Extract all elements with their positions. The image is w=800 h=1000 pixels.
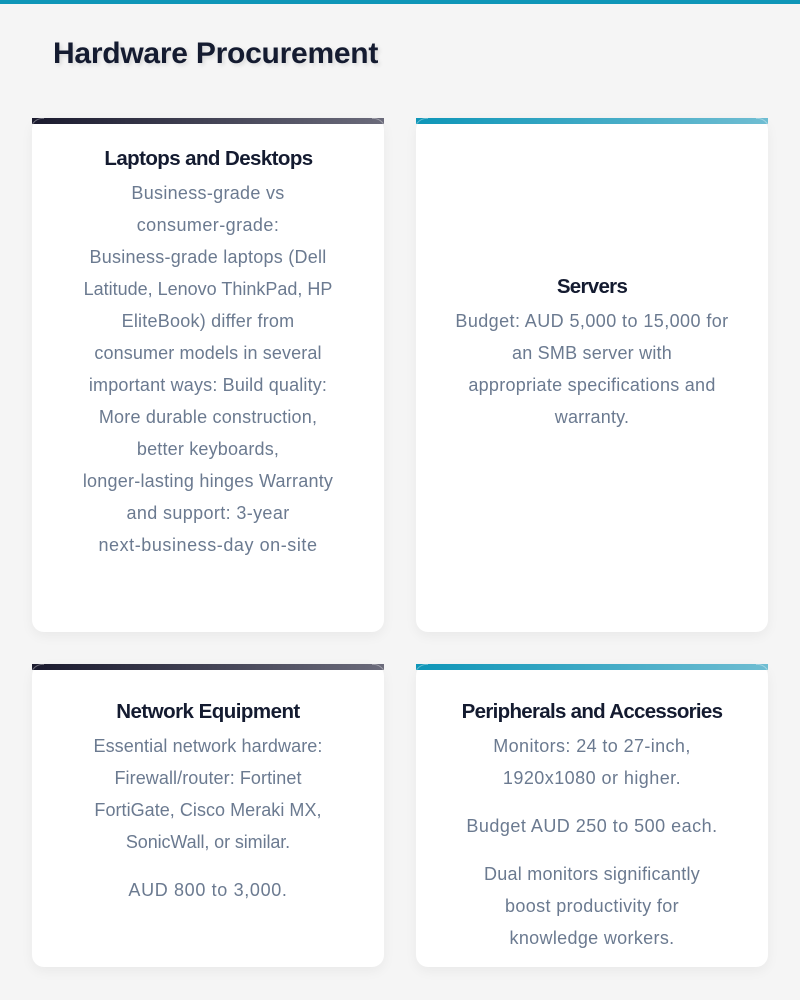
heading: Laptops and Desktops <box>104 147 313 170</box>
body text: Budget AUD 250 to 500 each. <box>466 816 718 836</box>
panel: network equipment <box>32 664 384 967</box>
body text: appropriate specifications and <box>468 375 716 395</box>
body text: AUD 800 to 3,000. <box>128 880 288 900</box>
panel: laptops and desktops <box>32 118 384 632</box>
body text: FortiGate, Cisco Meraki MX, <box>94 800 322 820</box>
panel: servers <box>416 118 768 632</box>
body text <box>466 736 718 948</box>
body text: Dual monitors significantly <box>484 864 700 884</box>
heading: Peripherals and Accessories <box>462 700 722 723</box>
body text: Firewall/router: Fortinet <box>114 768 302 788</box>
body text: More durable construction, <box>99 407 317 427</box>
panel: peripherals and accessories <box>416 664 768 967</box>
body text: EliteBook) differ from <box>122 311 294 331</box>
body text: Business-grade vs <box>131 183 285 203</box>
body text <box>83 183 333 555</box>
body text: an SMB server with <box>512 343 672 363</box>
top accent bar <box>0 0 800 4</box>
body text <box>93 736 323 900</box>
title: Hardware Procurement <box>53 37 378 70</box>
body text: Budget: AUD 5,000 to 15,000 for <box>455 311 729 331</box>
body text: consumer models in several <box>94 343 322 363</box>
body text: SonicWall, or similar. <box>126 832 290 852</box>
heading: Servers <box>557 275 627 298</box>
panel accent bar <box>416 664 768 670</box>
body text: better keyboards, <box>137 439 279 459</box>
panel accent bar <box>32 118 384 124</box>
body text: longer-lasting hinges Warranty <box>83 471 333 491</box>
body text: Monitors: 24 to 27-inch, <box>493 736 691 756</box>
body text: 1920x1080 or higher. <box>503 768 681 788</box>
body text: important ways: Build quality: <box>89 375 327 395</box>
body text: warranty. <box>555 407 629 427</box>
body text: consumer-grade: <box>137 215 279 235</box>
panel accent bar <box>32 664 384 670</box>
body text <box>455 311 729 427</box>
body text: Essential network hardware: <box>93 736 323 756</box>
panel accent bar <box>416 118 768 124</box>
body text: Business-grade laptops (Dell <box>89 247 327 267</box>
body text: and support: 3-year <box>126 503 290 523</box>
body text: Latitude, Lenovo ThinkPad, HP <box>84 279 332 299</box>
body text: boost productivity for <box>505 896 679 916</box>
body text: knowledge workers. <box>509 928 674 948</box>
body text: next-business-day on-site <box>98 535 318 555</box>
heading: Network Equipment <box>116 700 300 723</box>
